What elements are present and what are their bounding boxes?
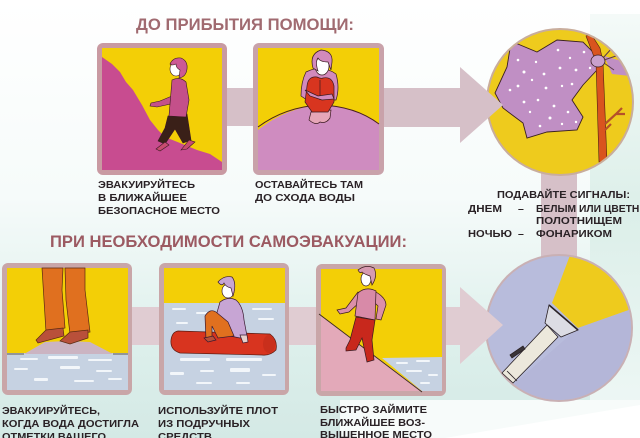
panel: use a raft: [159, 263, 289, 395]
caption: evacuate when: КОГДА ВОДА ДОСТИГЛА: [2, 418, 139, 430]
title: self-evacuation: ПРИ НЕОБХОДИМОСТИ САМОЭВАКУАЦИИ:: [50, 233, 407, 251]
icon: sitting person: [301, 50, 338, 124]
title: before help arrives: ДО ПРИБЫТИЯ ПОМОЩИ:: [136, 15, 354, 34]
icon: flashlight: [502, 305, 578, 383]
caption: stay: ДО СХОДА ВОДЫ: [255, 192, 355, 204]
panel: stay until water recedes: [253, 43, 384, 175]
connector band: bottom row: [130, 307, 462, 345]
connector band: between circles: [541, 170, 577, 258]
water highlights: [14, 356, 122, 382]
caption: give signals: ДНЕМ: [468, 203, 502, 215]
caption: give signals: [468, 188, 640, 240]
caption: raft: [158, 404, 279, 438]
caption: evacuate: БЕЗОПАСНОЕ МЕСТО: [98, 205, 220, 217]
panel: evacuate to nearest safe place: [97, 43, 227, 175]
icon: person on raft: [204, 277, 248, 343]
caption: high ground: [320, 403, 432, 438]
cloth: [495, 30, 597, 138]
caption: raft: ИСПОЛЬЗУЙТЕ ПЛОТ: [158, 404, 279, 417]
icon: log raft: [171, 331, 276, 355]
caption: stay: [255, 178, 363, 204]
caption: give signals: НОЧЬЮ: [468, 228, 512, 240]
stick: [586, 34, 607, 162]
arrow: bottom row to flashlight circle: [460, 287, 503, 364]
caption: evacuate when: [2, 404, 139, 438]
panel: evacuate when water reaches mark: [2, 263, 132, 395]
caption: stay: ОСТАВАЙТЕСЬ ТАМ: [255, 178, 363, 191]
caption: raft: ИЗ ПОДРУЧНЫХ: [158, 418, 250, 430]
caption: evacuate: В БЛИЖАЙШЕЕ: [98, 191, 187, 204]
circle: flashlight: [486, 254, 633, 402]
circle: signal with cloth: [486, 28, 634, 176]
caption: give signals: ПОДАВАЙТЕ СИГНАЛЫ:: [497, 188, 630, 201]
slope: [102, 57, 222, 170]
high ground slope: [321, 316, 422, 391]
arrow: top row to signal circle: [460, 67, 503, 143]
water highlights: [170, 308, 276, 384]
caption: high ground: БЫСТРО ЗАЙМИТЕ: [320, 403, 427, 416]
caption: give signals: –: [518, 203, 524, 215]
light beam: [552, 256, 629, 328]
connector band: top row: [225, 88, 462, 127]
icon: legs in orange trousers: [36, 268, 90, 344]
cloth dots: [509, 49, 591, 127]
hill: [258, 105, 379, 170]
caption: give signals: ФОНАРИКОМ: [536, 228, 612, 240]
caption: evacuate when: ЭВАКУИРУЙТЕСЬ,: [2, 404, 100, 417]
icon: climbing person: [337, 266, 386, 362]
caption: evacuate: [98, 178, 220, 217]
panel: occupy nearest high ground: [316, 264, 446, 396]
water: [382, 357, 442, 391]
caption: give signals: ПОЛОТНИЩЕМ: [536, 215, 622, 227]
mound: [24, 341, 113, 354]
caption: evacuate: ЭВАКУИРУЙТЕСЬ: [98, 178, 195, 191]
caption: high ground: БЛИЖАЙШЕЕ ВОЗ-: [320, 416, 426, 429]
knot: [591, 55, 605, 67]
caption: give signals: –: [518, 228, 524, 240]
icon: walking person: [150, 58, 195, 151]
